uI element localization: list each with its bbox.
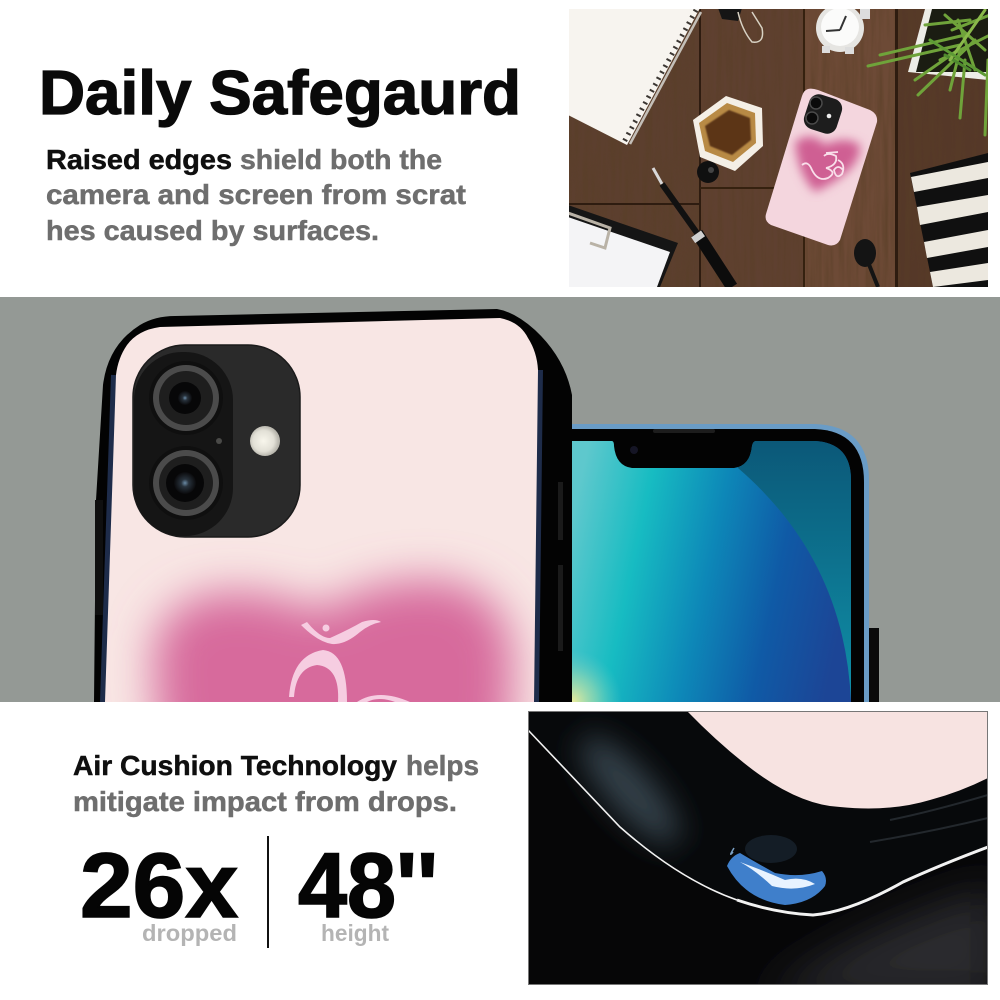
photo: air cushion corner close-up [528, 711, 1000, 1000]
mini phone case with heart and om [766, 89, 877, 245]
soft floor shading [776, 878, 987, 984]
text block: raised edges description [46, 144, 466, 246]
stat: 26x dropped: dropped [142, 920, 237, 946]
binder clip [718, 8, 763, 42]
stat: 48 inch height: 48'' [298, 835, 438, 937]
image border [528, 712, 988, 984]
photo: phone case on wooden desk [568, 4, 990, 287]
case outer shell [94, 309, 572, 702]
text block: air cushion technology [73, 750, 479, 817]
text block: raised edges description: hes caused by surfaces. [46, 215, 379, 246]
case edge band [528, 711, 988, 915]
pen [653, 168, 732, 287]
heart gradient [123, 550, 535, 702]
striped notepad [910, 153, 988, 287]
front of phone with blue frame [560, 424, 879, 702]
alarm clock [816, 4, 870, 54]
side buttons of case [95, 482, 563, 651]
notebook [568, 8, 701, 145]
pink case back [105, 318, 538, 702]
potted plant [868, 9, 990, 135]
side button [868, 628, 879, 702]
camera module [133, 345, 300, 537]
inner reflections [870, 795, 988, 842]
blue frame [560, 424, 869, 702]
text block: raised edges description: shield both the [240, 144, 442, 175]
air cushion bubble [727, 835, 826, 905]
om symbol [289, 620, 410, 702]
coffee cup [693, 96, 763, 183]
wooden desk planks [569, 9, 988, 287]
reflection on case edge [567, 723, 693, 857]
clipboard [568, 205, 678, 287]
text block: air cushion technology: Air Cushion Technology [73, 750, 397, 781]
screen [572, 441, 860, 702]
edge highlight [528, 730, 988, 915]
microphone dot [216, 438, 222, 444]
text block: air cushion technology: helps [406, 750, 479, 781]
upper lens [153, 365, 219, 431]
text block: raised edges description: camera and screen from scrat [46, 179, 466, 210]
main phone case [94, 309, 572, 702]
black bezel [560, 429, 864, 702]
blue inner rim [103, 370, 540, 702]
divider [267, 836, 269, 948]
pink case back [687, 711, 988, 808]
title: Daily Safegaurd [39, 59, 521, 128]
earbud [854, 239, 878, 287]
lower lens [153, 450, 219, 516]
stat: 26x dropped: 26x [80, 835, 238, 937]
speaker and front camera [630, 429, 715, 454]
gray band [0, 297, 1000, 702]
text block: air cushion technology: mitigate impact from drops. [73, 786, 457, 817]
stat: 48 inch height: height [321, 920, 389, 946]
flash [250, 426, 280, 456]
text block: raised edges description: Raised edges [46, 144, 232, 175]
